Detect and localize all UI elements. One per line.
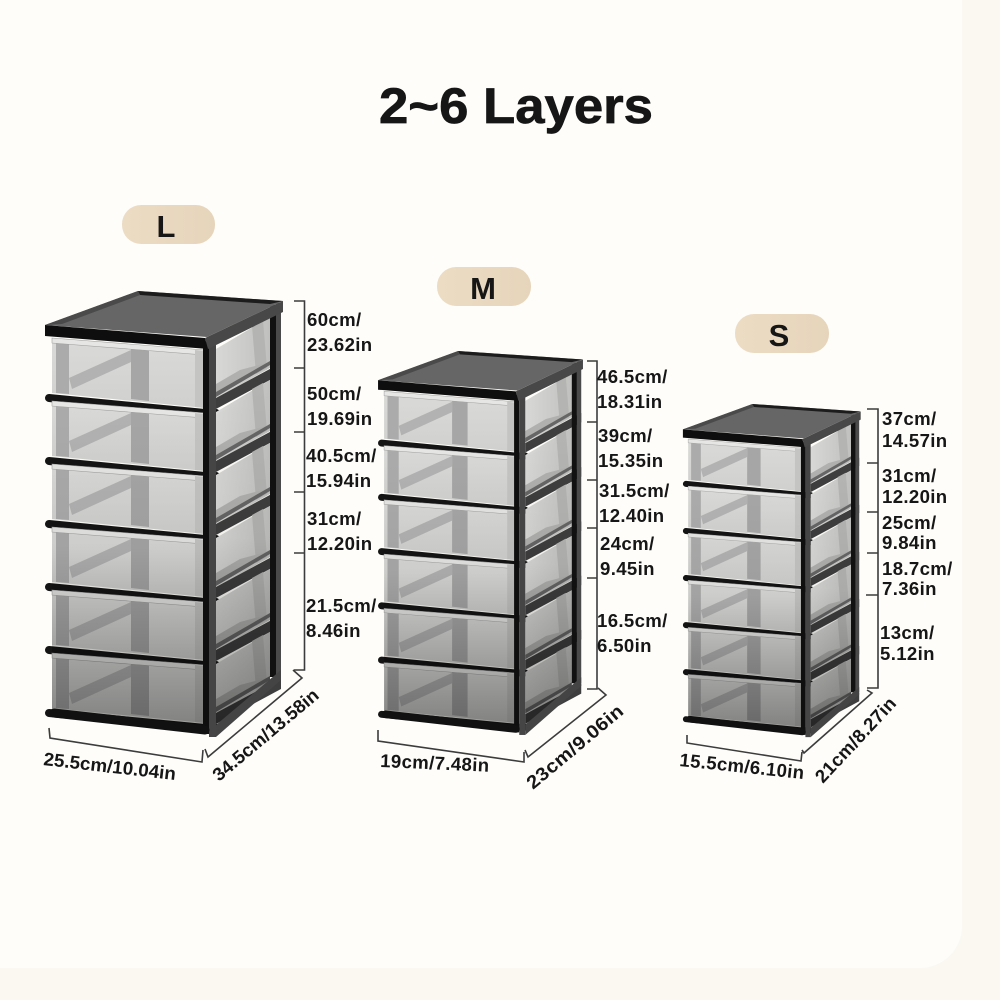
height labels S <box>880 408 953 664</box>
height labels S: 12.20in <box>882 486 948 507</box>
width dimension L <box>43 728 203 784</box>
height labels L: 19.69in <box>307 408 373 429</box>
height labels L: 21.5cm/ <box>306 595 377 616</box>
height labels M: 16.5cm/ <box>597 610 668 631</box>
height labels M <box>597 366 670 656</box>
title: 2~6 Layers <box>379 78 653 134</box>
height labels L: 50cm/ <box>307 383 361 404</box>
width dimension M: 19cm/7.48in <box>380 750 490 776</box>
size badge S: S <box>769 318 789 353</box>
size badge L <box>122 205 215 244</box>
height labels S: 37cm/ <box>882 408 936 429</box>
height labels S: 25cm/ <box>882 512 936 533</box>
height labels L: 31cm/ <box>307 508 361 529</box>
depth dimension M: 23cm/9.06in <box>522 700 627 793</box>
height bracket L <box>294 301 304 670</box>
height labels L: 12.20in <box>307 533 373 554</box>
height labels M: 39cm/ <box>598 425 652 446</box>
height labels S: 14.57in <box>882 430 948 451</box>
height labels S: 9.84in <box>882 532 937 553</box>
height labels S: 18.7cm/ <box>882 558 953 579</box>
height labels L <box>306 309 377 641</box>
height labels L: 15.94in <box>306 470 372 491</box>
height bracket S <box>866 409 878 688</box>
height labels L: 60cm/ <box>307 309 361 330</box>
size badge M <box>437 267 531 306</box>
drawer tower M <box>378 351 583 735</box>
height labels S: 7.36in <box>882 578 937 599</box>
height labels S: 31cm/ <box>882 465 936 486</box>
height labels M: 15.35in <box>598 450 664 471</box>
drawer tower S <box>683 404 861 737</box>
height labels M: 6.50in <box>597 635 652 656</box>
size badge L: L <box>157 209 175 244</box>
height labels M: 24cm/ <box>600 533 654 554</box>
size badge S <box>735 314 829 353</box>
depth dimension L: 34.5cm/13.58in <box>208 684 323 785</box>
size badge M: M <box>470 271 496 306</box>
width dimension L: 25.5cm/10.04in <box>43 748 177 784</box>
height labels M: 18.31in <box>597 391 663 412</box>
height labels S: 13cm/ <box>880 622 934 643</box>
height labels M: 46.5cm/ <box>597 366 668 387</box>
height labels L: 23.62in <box>307 334 373 355</box>
height labels M: 31.5cm/ <box>599 480 670 501</box>
depth dimension S: 21cm/8.27in <box>811 692 900 787</box>
height labels S: 5.12in <box>880 643 935 664</box>
height labels L: 40.5cm/ <box>306 445 377 466</box>
width dimension S: 15.5cm/6.10in <box>679 749 806 783</box>
width dimension M <box>378 730 524 776</box>
height labels L: 8.46in <box>306 620 361 641</box>
drawer tower L <box>45 291 283 737</box>
height bracket M <box>587 361 597 689</box>
height labels M: 12.40in <box>599 505 665 526</box>
height labels M: 9.45in <box>600 558 655 579</box>
